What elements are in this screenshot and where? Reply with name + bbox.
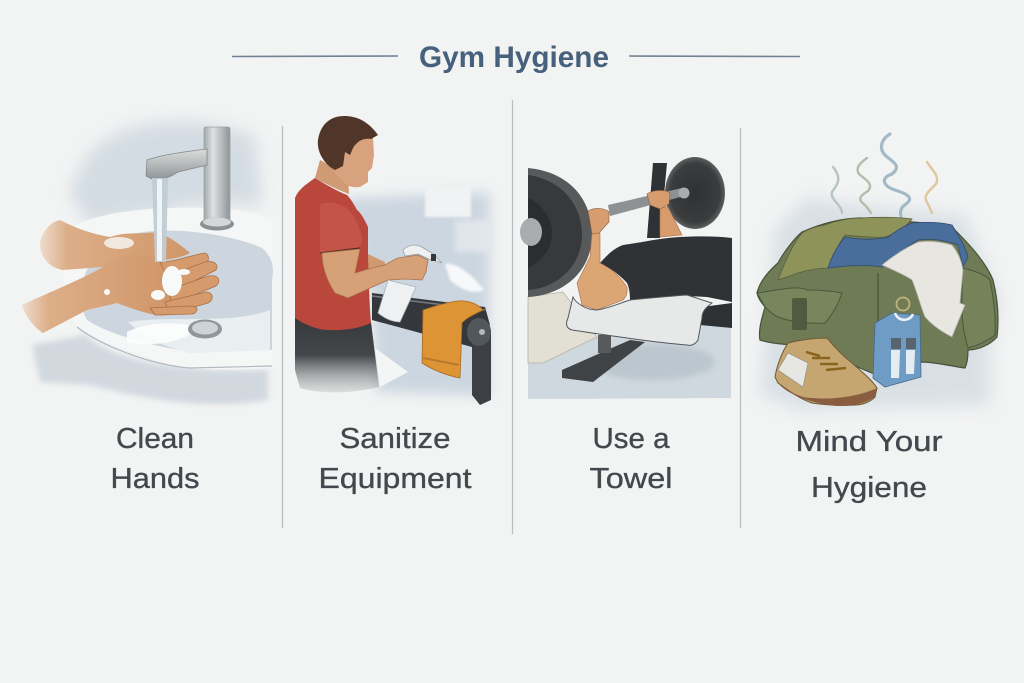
panel: use a towel	[520, 157, 732, 399]
panel: mind your hygiene	[757, 134, 1000, 410]
panel: clean hands	[22, 121, 273, 404]
pocket flap	[757, 288, 842, 323]
wall wash	[345, 192, 490, 396]
icon: orange towel	[422, 301, 483, 378]
label: use a towel: Use a	[592, 423, 670, 455]
head	[330, 125, 374, 187]
icon: hygiene pack	[873, 298, 921, 387]
under-sink shadow	[32, 335, 268, 404]
icon: shoe	[775, 338, 877, 406]
forearm and hand	[322, 249, 428, 298]
right forearm	[660, 207, 682, 237]
background wash	[760, 197, 1000, 410]
red t-shirt	[295, 178, 371, 330]
hair	[318, 116, 378, 170]
odour wisps	[832, 134, 937, 216]
neck	[315, 160, 349, 194]
panel: sanitize equipment	[295, 116, 491, 405]
icon: spray bottle	[378, 245, 442, 322]
bench frame	[528, 163, 732, 382]
soap foam	[104, 237, 190, 300]
floor wash	[528, 320, 731, 399]
title: Gym Hygiene	[419, 41, 609, 74]
barbell	[520, 157, 725, 297]
fingers	[150, 253, 219, 315]
side pocket	[962, 268, 995, 348]
wall wash	[70, 121, 262, 225]
water ripples	[127, 323, 200, 344]
bar	[372, 293, 491, 405]
label: use a towel: Towel	[590, 463, 672, 495]
hands	[22, 220, 219, 333]
label: mind your hygiene: Hygiene	[811, 472, 927, 504]
left hand	[588, 208, 609, 234]
blue shirt	[828, 222, 968, 268]
icon: white towel on bench	[567, 295, 712, 345]
label: sanitize equipment: Equipment	[318, 463, 472, 495]
torso in black shirt	[600, 236, 732, 302]
front arm	[22, 255, 172, 333]
icon: drain	[188, 320, 222, 338]
bag body	[757, 218, 998, 373]
label: clean hands: Clean	[116, 423, 194, 455]
trousers	[295, 318, 379, 392]
icon: faucet	[146, 127, 234, 230]
sink basin	[64, 208, 273, 370]
left arm	[577, 233, 627, 310]
water stream	[152, 178, 168, 262]
back arm	[368, 254, 385, 272]
lifter	[577, 190, 732, 310]
icon: gym bag	[757, 217, 998, 373]
spray mist	[445, 264, 484, 292]
white towel	[882, 241, 965, 337]
label: clean hands: Hands	[110, 463, 200, 495]
label: mind your hygiene: Mind Your	[796, 426, 943, 458]
right hand	[647, 190, 670, 209]
back arm	[40, 220, 190, 270]
sleeve	[320, 202, 362, 253]
label: sanitize equipment: Sanitize	[340, 423, 450, 455]
olive jacket	[778, 217, 912, 280]
man	[295, 116, 428, 330]
